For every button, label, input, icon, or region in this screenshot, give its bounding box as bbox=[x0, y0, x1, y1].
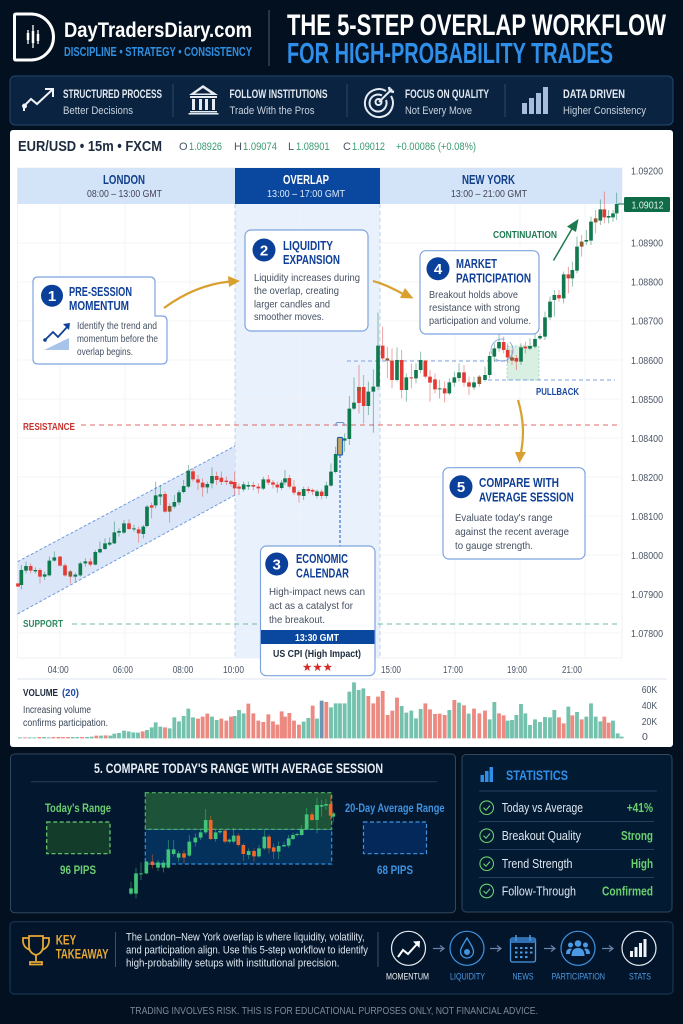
benefit 2 bbox=[230, 89, 328, 117]
footer disclaimer: TRADING INVOLVES RISK. THIS IS FOR EDUCATIONAL PURPOSES ONLY, NOT FINANCIAL ADVICE. bbox=[130, 1005, 538, 1017]
volume axis labels: 40K bbox=[642, 700, 657, 712]
icon: target with arrow bbox=[365, 87, 394, 117]
benefit 4: DATA DRIVEN bbox=[563, 89, 625, 101]
callout: step 2 liquidity expansion: larger candles and bbox=[254, 300, 330, 310]
callout: step 4 market participation: Breakout holds above bbox=[429, 290, 518, 301]
icon: rising line arrow bbox=[23, 89, 53, 111]
price axis labels: 1.08800 bbox=[631, 276, 663, 288]
news candle highlight bbox=[336, 422, 344, 546]
benefit 1: Better Decisions bbox=[63, 105, 133, 117]
volume axis labels bbox=[642, 684, 657, 743]
chart ticker header: 1.08926 bbox=[189, 141, 222, 153]
icon: bank building bbox=[188, 85, 218, 114]
panel: statistics bbox=[462, 754, 672, 912]
today's range legend bbox=[45, 803, 111, 877]
chart ticker header: H bbox=[234, 141, 242, 153]
stat row: today vs average: +41% bbox=[627, 801, 653, 815]
panel: compare today's range bbox=[10, 754, 456, 913]
benefit 1 bbox=[63, 89, 162, 117]
callout: step 3 economic calendar: High-impact news can bbox=[269, 587, 365, 598]
stat row: breakout quality bbox=[480, 829, 653, 843]
benefit 1: STRUCTURED PROCESS bbox=[63, 89, 162, 101]
chart ticker header: 1.09012 bbox=[352, 141, 385, 153]
price axis labels: 1.08500 bbox=[631, 394, 663, 406]
average range legend: 68 PIPS bbox=[377, 865, 413, 877]
impact stars: ★★★ bbox=[302, 660, 333, 674]
brand name: DayTradersDiary.com bbox=[64, 19, 252, 42]
continuation label: CONTINUATION bbox=[493, 229, 557, 241]
callout: step 3 economic calendar bbox=[260, 546, 375, 676]
event time bar: 13:30 GMT bbox=[295, 632, 339, 644]
benefit 2: FOLLOW INSTITUTIONS bbox=[230, 89, 328, 101]
workflow: momentum bbox=[386, 931, 429, 982]
workflow: liquidity: LIQUIDITY bbox=[450, 972, 485, 982]
workflow: liquidity bbox=[450, 931, 485, 982]
volume note: confirms participation. bbox=[23, 718, 108, 729]
callout: step 2 liquidity expansion: the overlap, creating bbox=[254, 286, 339, 297]
session band: London: LONDON bbox=[103, 173, 145, 187]
chart ticker header: +0.00086 (+0.08%) bbox=[396, 141, 476, 153]
stat row: trend strength bbox=[480, 857, 653, 871]
panel: key takeaway bbox=[10, 922, 673, 994]
volume note bbox=[23, 705, 108, 729]
panel: volume bbox=[17, 679, 667, 743]
price axis labels: 1.08600 bbox=[631, 355, 663, 367]
chart ticker header: C bbox=[343, 141, 351, 153]
pullback zone bbox=[507, 346, 539, 380]
benefit 3: FOCUS ON QUALITY bbox=[405, 89, 489, 101]
callout: step 4 market participation: 4 bbox=[434, 261, 443, 278]
overlap session shading bbox=[235, 204, 380, 658]
price axis labels: 1.08200 bbox=[631, 472, 663, 484]
volume note: Increasing volume bbox=[23, 705, 91, 716]
benefit 4 bbox=[563, 89, 646, 117]
key takeaway text: and participation align. Use this 5-step workflow to identify bbox=[126, 944, 369, 956]
stat row: today vs average bbox=[480, 801, 653, 815]
callout: step 5 compare with average session: against the recent average bbox=[455, 527, 569, 538]
price axis labels: 1.09200 bbox=[631, 166, 663, 178]
today's range legend: Today's Range bbox=[45, 803, 111, 815]
volume axis labels: 60K bbox=[642, 684, 657, 696]
chart ticker header: O bbox=[179, 141, 188, 153]
callout: step 1 pre-session momentum: PRE-SESSION bbox=[69, 284, 132, 299]
session band: New York: 13:00 – 21:00 GMT bbox=[451, 188, 527, 200]
volume axis labels: 20K bbox=[642, 716, 657, 728]
icon: statistics bars bbox=[480, 767, 493, 782]
benefit 3: Not Every Move bbox=[405, 105, 472, 117]
callout: step 3 economic calendar: act as a catalyst for bbox=[269, 601, 354, 612]
rising channel bbox=[18, 446, 235, 614]
session band: Overlap bbox=[235, 168, 380, 204]
stat row: breakout quality: Breakout Quality bbox=[502, 829, 582, 843]
volume bars: first half bbox=[20, 701, 340, 738]
time axis labels: 17:00 bbox=[443, 665, 463, 676]
time axis labels: 04:00 bbox=[48, 665, 69, 676]
callout: step 2 liquidity expansion: smoother moves. bbox=[254, 312, 324, 323]
session band: London: 08:00 – 13:00 GMT bbox=[87, 188, 162, 200]
chart ticker header: L bbox=[288, 141, 294, 153]
price axis labels: 1.08000 bbox=[631, 550, 663, 562]
icon: ascending bars bbox=[522, 87, 548, 114]
brand tagline: DISCIPLINE • STRATEGY • CONSISTENCY bbox=[64, 45, 252, 59]
arrow: step 1 to step 2 bbox=[164, 276, 240, 308]
callout: step 3 economic calendar: the breakout. bbox=[269, 615, 325, 626]
callout: step 5 compare with average session: COMPARE WITH bbox=[479, 475, 559, 490]
key takeaway text: The London–New York overlap is where liquidity, volatility, bbox=[126, 932, 365, 944]
arrow bbox=[490, 946, 501, 952]
callout: step 2 liquidity expansion: EXPANSION bbox=[283, 252, 340, 267]
callout: step 5 compare with average session bbox=[443, 468, 585, 559]
candlesticks: second half bbox=[345, 192, 617, 452]
price axis labels: 1.08900 bbox=[631, 238, 663, 250]
callout: step 1 pre-session momentum: momentum before the bbox=[77, 334, 158, 345]
stat row: trend strength: Trend Strength bbox=[502, 857, 573, 871]
workflow: stats: STATS bbox=[629, 972, 651, 982]
arrow: step 2 to step 4 bbox=[373, 281, 414, 298]
breakout level lines bbox=[347, 361, 615, 380]
time axis labels: 15:00 bbox=[381, 665, 401, 676]
volume heading: VOLUME bbox=[23, 687, 58, 699]
key takeaway heading: TAKEAWAY bbox=[56, 946, 108, 962]
icon: trend line and area bbox=[43, 323, 70, 350]
arrow bbox=[602, 946, 613, 952]
callout: step 4 market participation: PARTICIPATION bbox=[456, 271, 531, 286]
stat row: today vs average: Today vs Average bbox=[502, 801, 583, 815]
workflow: participation bbox=[552, 931, 605, 982]
current price tag bbox=[618, 197, 670, 212]
session band: Overlap: 13:00 – 17:00 GMT bbox=[267, 188, 345, 200]
candlesticks: first half bbox=[18, 447, 336, 589]
arrow: continuation bbox=[554, 219, 578, 260]
time axis labels: 10:00 bbox=[223, 665, 244, 676]
support level: SUPPORT bbox=[23, 618, 63, 630]
callout: step 1 pre-session momentum bbox=[33, 277, 167, 364]
time axis labels: 19:00 bbox=[507, 665, 527, 676]
stat row: follow-through: Confirmed bbox=[602, 884, 653, 898]
pullback highlight ring bbox=[491, 339, 513, 361]
average range legend: 20-Day Average Range bbox=[345, 803, 444, 815]
time axis labels: 06:00 bbox=[113, 665, 133, 676]
volume axis labels: 0 bbox=[642, 731, 648, 743]
key takeaway heading bbox=[56, 932, 108, 962]
statistics heading: STATISTICS bbox=[506, 768, 568, 783]
time axis labels bbox=[48, 665, 582, 676]
arrow bbox=[544, 946, 555, 952]
average range legend bbox=[345, 803, 444, 877]
stat row: trend strength: High bbox=[631, 857, 653, 871]
time axis labels: 08:00 bbox=[173, 665, 194, 676]
arrow: step 4 to step 5 bbox=[515, 400, 526, 463]
session band: New York: NEW YORK bbox=[462, 173, 515, 187]
callout: step 2 liquidity expansion: LIQUIDITY bbox=[283, 238, 333, 253]
benefit 2: Trade With the Pros bbox=[230, 105, 315, 117]
stat row: follow-through: Follow-Through bbox=[502, 884, 576, 898]
key takeaway text: high-probability setups with institutional precision. bbox=[126, 958, 340, 970]
time axis labels: 21:00 bbox=[562, 665, 582, 676]
price axis labels: 1.07800 bbox=[631, 628, 663, 640]
price axis labels: 1.07900 bbox=[631, 589, 663, 601]
price axis labels bbox=[631, 166, 663, 640]
callout: step 1 pre-session momentum: overlap begins. bbox=[77, 347, 133, 358]
range heading: 5. COMPARE TODAY'S RANGE WITH AVERAGE SESSION bbox=[94, 760, 383, 776]
session band: London bbox=[18, 168, 235, 204]
workflow: news: NEWS bbox=[512, 972, 534, 982]
panel: main chart bbox=[10, 130, 673, 747]
callout: step 1 pre-session momentum: 1 bbox=[48, 288, 56, 305]
range comparison chart bbox=[131, 793, 333, 898]
today's range legend: 96 PIPS bbox=[60, 865, 96, 877]
stat row: follow-through bbox=[480, 884, 653, 898]
price axis labels: 1.08400 bbox=[631, 433, 663, 445]
callout: step 5 compare with average session: AVERAGE SESSION bbox=[479, 490, 574, 505]
chart ticker header: 1.09074 bbox=[243, 141, 277, 153]
arrow bbox=[433, 946, 444, 952]
workflow: momentum: MOMENTUM bbox=[386, 972, 429, 982]
chart ticker header: 1.08901 bbox=[296, 141, 330, 153]
callout: step 3 economic calendar: US CPI (High Impact) bbox=[273, 648, 361, 660]
workflow: participation: PARTICIPATION bbox=[552, 972, 605, 982]
callout: step 2 liquidity expansion bbox=[245, 230, 368, 331]
callout: step 4 market participation: participation and volume. bbox=[429, 316, 531, 327]
callout: step 5 compare with average session: to gauge strength. bbox=[455, 541, 533, 552]
callout: step 2 liquidity expansion: Liquidity increases during bbox=[254, 273, 360, 284]
callout: step 5 compare with average session: 5 bbox=[457, 479, 465, 496]
callout: step 3 economic calendar: ECONOMIC bbox=[296, 551, 348, 566]
session band: New York bbox=[380, 168, 622, 204]
callout: step 5 compare with average session: Evaluate today's range bbox=[455, 513, 553, 524]
chart ticker header: EUR/USD • 15m • FXCM bbox=[18, 139, 162, 155]
session band: Overlap: OVERLAP bbox=[283, 173, 329, 187]
callout: step 3 economic calendar: CALENDAR bbox=[296, 566, 349, 581]
key takeaway text bbox=[126, 932, 369, 970]
header bbox=[14, 9, 666, 70]
workflow: news bbox=[510, 935, 536, 982]
icon: trophy bbox=[23, 936, 49, 964]
volume bars: second half bbox=[345, 682, 622, 738]
callout: step 3 economic calendar: 3 bbox=[273, 556, 281, 574]
pullback label: PULLBACK bbox=[536, 386, 579, 398]
stat row: breakout quality: Strong bbox=[621, 829, 653, 843]
price axis labels: 1.08700 bbox=[631, 316, 663, 328]
benefit 3 bbox=[405, 89, 489, 117]
benefit 4: Higher Consistency bbox=[563, 105, 646, 117]
chart plot background bbox=[18, 168, 622, 658]
callout: step 2 liquidity expansion: 2 bbox=[260, 242, 268, 260]
resistance level: RESISTANCE bbox=[23, 422, 75, 433]
callout: step 1 pre-session momentum: MOMENTUM bbox=[69, 298, 129, 313]
volume heading: (20) bbox=[62, 687, 79, 699]
icon: DayTradersDiary D logo bbox=[14, 14, 54, 60]
workflow: stats bbox=[622, 931, 656, 982]
key takeaway heading: KEY bbox=[56, 932, 76, 948]
panel: benefits strip bbox=[10, 76, 673, 125]
callout: step 1 pre-session momentum: Identify the trend and bbox=[77, 321, 157, 332]
callout: step 4 market participation: MARKET bbox=[456, 256, 497, 271]
chart ticker header bbox=[18, 139, 476, 155]
price axis labels: 1.08100 bbox=[631, 511, 663, 523]
callout: step 4 market participation: resistance with strong bbox=[429, 303, 520, 314]
callout: step 4 market participation bbox=[420, 251, 539, 334]
current price tag: 1.09012 bbox=[632, 200, 664, 212]
